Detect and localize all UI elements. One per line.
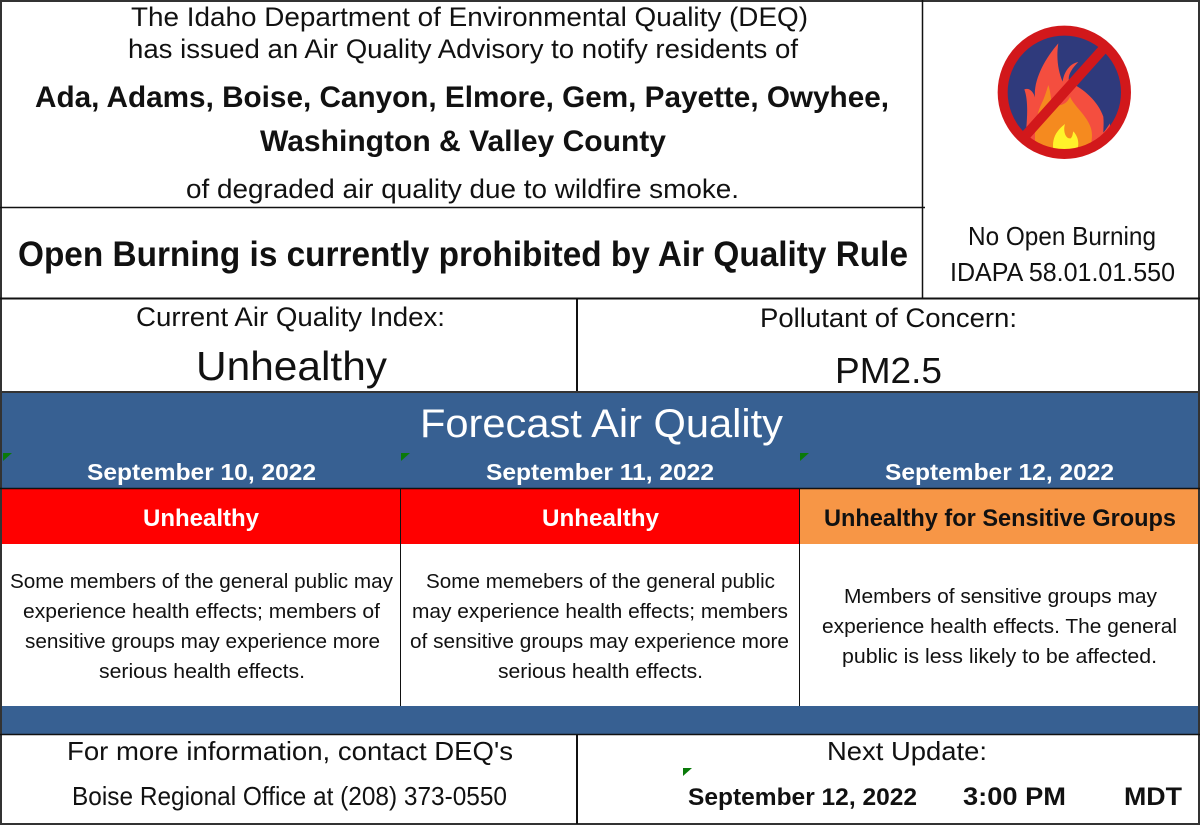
panel: forecast (0, 392, 1200, 683)
text: pollutant label: Pollutant of Concern: (760, 303, 1017, 333)
panel: contact information (67, 736, 513, 811)
panel: contact information: For more information, contact DEQ's (67, 736, 513, 766)
panel: advisory notice (35, 2, 889, 204)
text: next update timezone: MDT (1124, 783, 1182, 811)
icon: no fire symbol (1003, 31, 1126, 154)
forecast day 3 (800, 459, 1200, 668)
text: next update date: September 12, 2022 (688, 784, 917, 811)
panel: pollutant of concern (760, 303, 1017, 391)
text: day 2 health effects: may experience health effects; members (412, 600, 788, 623)
panel: contact information: Boise Regional Office at (208) 373-0550 (72, 781, 507, 811)
heading: affected counties: Washington & Valley County (260, 125, 666, 158)
date: day 3: September 12, 2022 (885, 459, 1114, 485)
heading: affected counties: Ada, Adams, Boise, Canyon, Elmore, Gem, Payette, Owyhee, (35, 81, 889, 114)
text: rule citation: IDAPA 58.01.01.550 (950, 257, 1175, 287)
date: day 1: September 10, 2022 (87, 459, 316, 485)
text: day 1 health effects: Some members of the general public may (10, 570, 394, 593)
rating: day 2: Unhealthy (542, 505, 660, 532)
forecast day 1 (0, 459, 400, 683)
text: day 1 health effects: experience health effects; members of (23, 600, 380, 623)
text: advisory intro: The Idaho Department of Environmental Quality (DEQ) (131, 2, 808, 32)
text: pollutant value: PM2.5 (835, 350, 942, 391)
text: day 3 health effects (822, 585, 1177, 668)
text: day 2 health effects: of sensitive groups may experience more (410, 630, 789, 653)
text: day 3 health effects: experience health effects. The general (822, 615, 1177, 638)
text: advisory reason: of degraded air quality due to wildfire smoke. (186, 174, 739, 204)
text: advisory intro: has issued an Air Quality Advisory to notify residents of (128, 34, 798, 64)
text: day 1 health effects: sensitive groups may experience more (25, 630, 380, 653)
text: index label: Current Air Quality Index: (136, 302, 445, 332)
heading: affected counties (35, 81, 889, 158)
text: day 1 health effects: serious health effects. (99, 660, 305, 683)
text: day 2 health effects: Some memebers of the general public (426, 570, 775, 593)
text: day 1 health effects (10, 570, 394, 683)
rating: day 3: Unhealthy for Sensitive Groups (824, 505, 1176, 532)
forecast day 2 (400, 459, 800, 683)
rating: day 1: Unhealthy (143, 505, 260, 532)
panel: current air quality index (136, 302, 445, 389)
panel: next update (688, 736, 1182, 811)
panel: no open burning (950, 31, 1175, 287)
text: advisory intro (128, 2, 808, 64)
text: day 3 health effects: Members of sensitive groups may (844, 585, 1158, 608)
text: day 3 health effects: public is less likely to be affected. (842, 645, 1157, 668)
heading: open burning prohibition: Open Burning is currently prohibited by Air Quality Rule (18, 235, 908, 274)
heading: forecast air quality: Forecast Air Quality (420, 402, 783, 446)
text: next update label: Next Update: (827, 736, 987, 766)
text: day 2 health effects (410, 570, 789, 683)
text: rule citation: No Open Burning (968, 221, 1156, 251)
text: rule citation (950, 221, 1175, 287)
text: day 2 health effects: serious health effects. (498, 660, 703, 683)
date: day 2: September 11, 2022 (486, 459, 714, 485)
text: next update time: 3:00 PM (963, 783, 1066, 811)
text: index value: Unhealthy (196, 343, 388, 389)
